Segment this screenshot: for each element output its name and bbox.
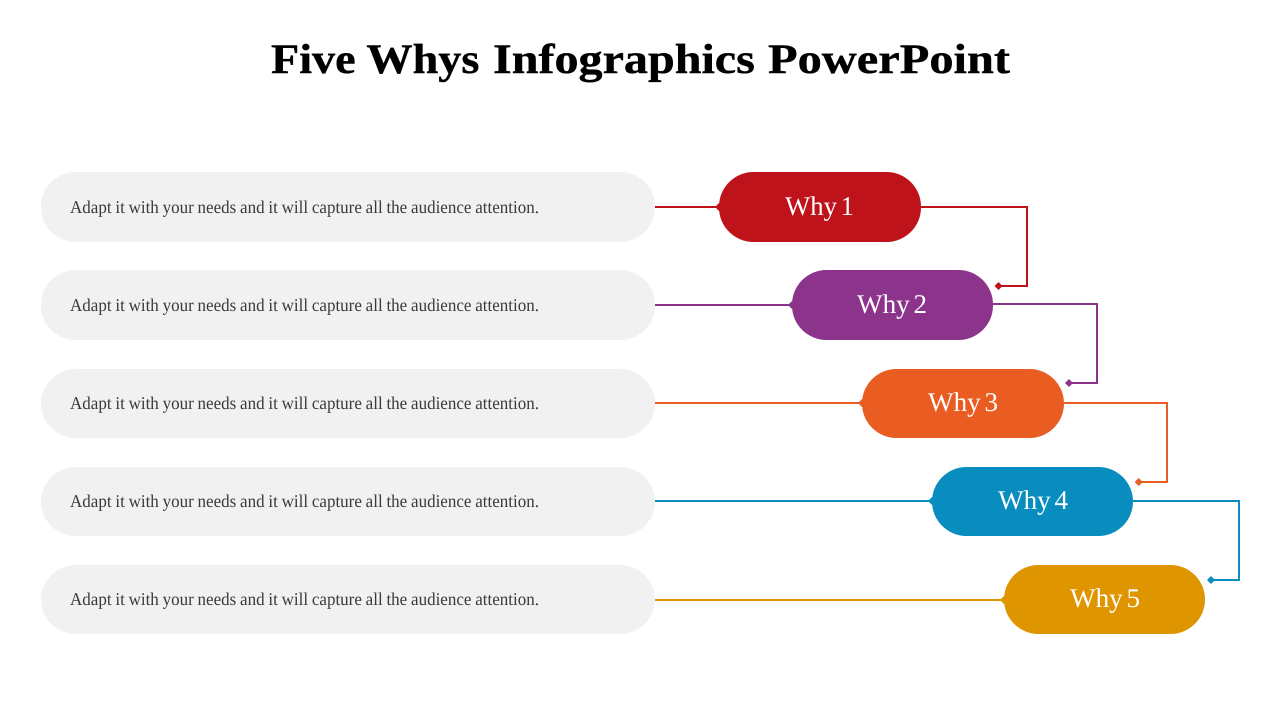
- pill: why 1: [719, 172, 921, 242]
- title: [271, 37, 1010, 83]
- title: Infographics: [493, 37, 755, 83]
- pill: why 5: [1004, 565, 1205, 634]
- pill: why 4: [932, 467, 1133, 536]
- panel: description 3: [41, 369, 655, 438]
- row 2: why 2: [41, 270, 1097, 387]
- title: PowerPoint: [768, 37, 1010, 83]
- panel: description 4: Adapt it with your needs and it will capture all the audience attention.: [70, 491, 539, 511]
- connector: description 2 to why 2: [655, 301, 796, 309]
- connector: description 1 to why 1: [655, 203, 723, 211]
- pill: why 2: [792, 270, 993, 340]
- panel: description 2: [41, 270, 655, 340]
- connector: description 3 to why 3: [655, 399, 866, 407]
- panel: description 3: Adapt it with your needs and it will capture all the audience attention.: [70, 393, 539, 413]
- arrow: why 1 to why 2: [921, 207, 1027, 290]
- panel: description 2: Adapt it with your needs and it will capture all the audience attention.: [70, 295, 539, 315]
- pill: why 4: Why 4: [998, 485, 1069, 515]
- panel: description 5: [41, 565, 655, 634]
- panel: description 5: Adapt it with your needs and it will capture all the audience attention.: [70, 589, 539, 609]
- pill: why 1: Why 1: [785, 191, 854, 221]
- row 4: why 4: [41, 467, 1239, 584]
- pill: why 2: Why 2: [857, 289, 927, 319]
- panel: description 1: [41, 172, 655, 242]
- arrow: why 2 to why 3: [993, 304, 1097, 387]
- arrow: why 4 to why 5: [1133, 501, 1239, 584]
- connector: description 4 to why 4: [655, 497, 936, 505]
- connector: description 5 to why 5: [655, 596, 1008, 604]
- row 3: why 3: [41, 369, 1167, 486]
- pill: why 5: Why 5: [1070, 583, 1140, 613]
- pill: why 3: Why 3: [928, 387, 998, 417]
- panel: description 1: Adapt it with your needs and it will capture all the audience attention.: [70, 197, 539, 217]
- arrow: why 3 to why 4: [1064, 403, 1167, 486]
- title: Five Whys: [271, 37, 479, 83]
- pill: why 3: [862, 369, 1064, 438]
- row 1: why 1: [41, 172, 1027, 290]
- row 5: why 5: [41, 565, 1205, 634]
- panel: description 4: [41, 467, 655, 536]
